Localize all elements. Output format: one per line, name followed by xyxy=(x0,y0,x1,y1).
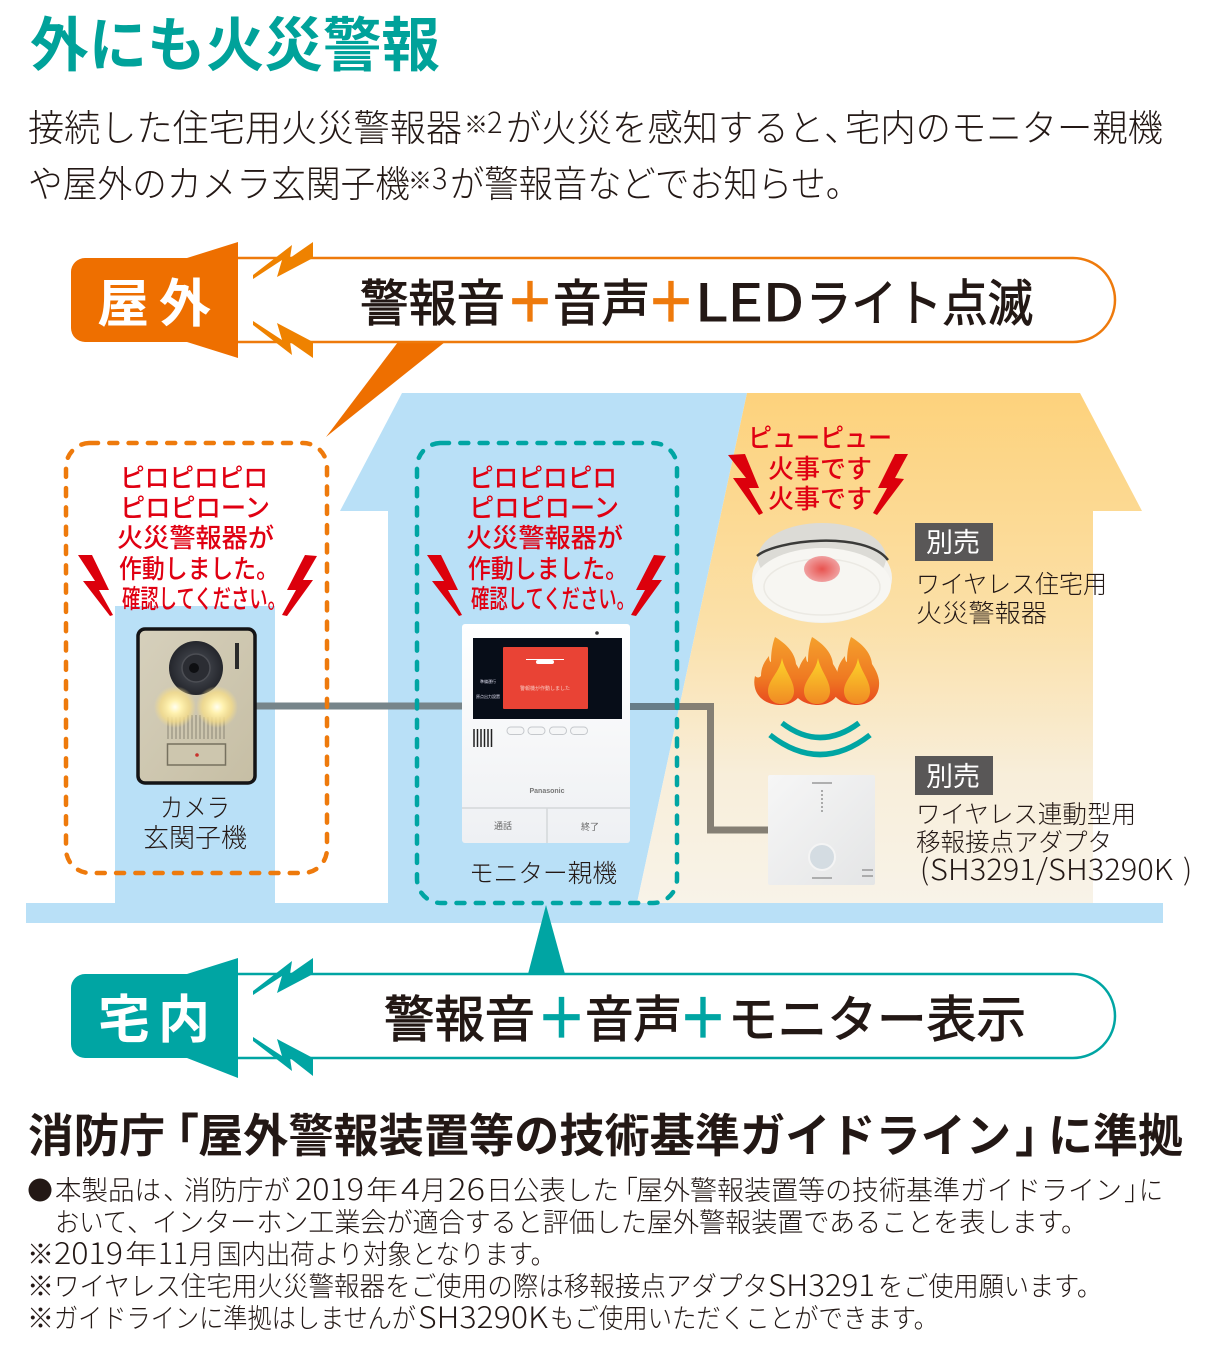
notes: 国内出荷より対象となります。 xyxy=(217,1233,555,1272)
notes: 4 xyxy=(401,1167,420,1209)
section heading: 消防庁 xyxy=(28,1110,165,1162)
banner text: ＋ xyxy=(680,991,726,1049)
intro text: ※ xyxy=(408,161,432,196)
notes: 2019 xyxy=(54,1231,123,1273)
notes: 26 xyxy=(448,1167,485,1209)
banner pill xyxy=(238,974,1115,1058)
section heading: 屋外警報装置等の技術基準ガイドライン xyxy=(198,1110,1011,1162)
alarm bolts: outdoor unit xyxy=(78,555,317,616)
intro text: や屋外のカメラ玄関子機 xyxy=(28,154,410,208)
alarm speech: outdoor unit: 確認してください。 xyxy=(122,584,286,614)
section heading: 」 xyxy=(1015,1110,1061,1162)
monitor unit: 通話 xyxy=(494,821,512,831)
badge label: 宅 xyxy=(98,992,150,1050)
notes: 年 xyxy=(366,1169,398,1208)
alarm speech: fire alarm: 火事です xyxy=(768,454,872,484)
intro text: 宅内のモニター親機 xyxy=(845,98,1163,152)
label: monitor unit: モニター親機 xyxy=(469,854,617,890)
sound bolts xyxy=(253,242,313,358)
relay adapter device xyxy=(768,775,875,885)
notes: おいて xyxy=(55,1201,127,1240)
notes: ※ xyxy=(27,1297,54,1336)
notes: 屋外警報装置等の技術基準ガイドライン xyxy=(636,1169,1122,1208)
notes: 」 xyxy=(1124,1169,1151,1208)
monitor unit: Panasonic xyxy=(529,788,565,795)
ground strip xyxy=(26,903,1163,923)
notes: 消防庁が xyxy=(184,1169,290,1208)
notes: 月 xyxy=(189,1233,214,1272)
intro text: 接続した住宅用火災警報器 xyxy=(28,98,462,152)
badge label: 屋 xyxy=(97,276,149,334)
notes: インターホン工業会が適合すると評価した屋外警報装置であることを表します。 xyxy=(152,1201,1087,1240)
notes: 年 xyxy=(125,1233,157,1272)
bullet xyxy=(28,1178,52,1202)
notes: に xyxy=(1139,1169,1163,1208)
house: blue indoor side xyxy=(115,393,747,906)
wireless fire alarm device xyxy=(752,523,892,623)
monitor unit: 終了 xyxy=(581,821,599,832)
alarm speech: fire alarm: 火事です xyxy=(768,484,872,514)
alarm speech: outdoor unit: 火災警報器が xyxy=(117,523,274,553)
title: 外にも火災警報 xyxy=(30,13,440,79)
dashed box: monitor xyxy=(417,443,677,903)
camera door unit xyxy=(138,629,255,783)
indoor alert banner xyxy=(71,905,1115,1078)
alarm speech: outdoor unit: ピロピローン xyxy=(120,493,270,523)
banner text: ＋ xyxy=(648,275,694,333)
speaker badge xyxy=(71,958,238,1078)
notes: ※ xyxy=(27,1265,54,1304)
tag: sold separately (adapter) xyxy=(915,756,993,795)
sound bolts xyxy=(253,958,313,1076)
label: camera door unit: 玄関子機 xyxy=(143,818,247,855)
badge label xyxy=(97,276,211,334)
notes: SH3291 xyxy=(768,1263,875,1305)
dashed box: outdoor unit xyxy=(66,443,327,873)
intro text: ※ xyxy=(464,105,488,140)
wireless waves xyxy=(770,723,870,754)
label: relay adapter: ワイヤレス連動型用 xyxy=(916,795,1136,831)
monitor unit xyxy=(462,624,630,843)
speaker badge xyxy=(71,242,238,358)
label: camera door unit xyxy=(143,788,247,855)
alarm speech: monitor: ピロピロピロ xyxy=(469,463,617,493)
monitor unit: 準備運行 xyxy=(480,678,496,684)
label: relay adapter xyxy=(916,795,1192,889)
intro text xyxy=(28,98,1163,208)
banner text: 警報音 xyxy=(384,992,535,1048)
intro text: 3 xyxy=(432,156,448,198)
intro text: が火災を感知すると xyxy=(506,98,824,152)
tag: sold separately (adapter): 別売 xyxy=(926,762,980,792)
banner text xyxy=(384,991,1026,1049)
badge label: 外 xyxy=(159,276,211,334)
label: camera door unit: カメラ xyxy=(160,788,230,825)
notes: 11 xyxy=(158,1231,188,1273)
alarm speech: monitor xyxy=(466,463,635,614)
notes: ※ xyxy=(27,1233,54,1272)
banner text: ＋ xyxy=(538,991,585,1049)
callout wedge: outdoor xyxy=(326,342,445,437)
badge label: 内 xyxy=(158,992,210,1050)
alarm speech: outdoor unit: ピロピロピロ xyxy=(120,463,268,493)
notes: 2019 xyxy=(295,1167,364,1209)
alarm speech: fire alarm: ピューピュー xyxy=(748,423,892,453)
connection cable xyxy=(255,706,768,830)
alarm speech: outdoor unit: 作動しました。 xyxy=(119,554,279,584)
banner pill xyxy=(238,258,1115,342)
label: wireless fire alarm: 火災警報器 xyxy=(916,594,1047,630)
label: relay adapter: SH3291/SH3290K xyxy=(930,847,1173,889)
tag: sold separately (alarm) xyxy=(915,523,993,561)
monitor unit: 原点出力設置 xyxy=(476,693,500,699)
banner text: ライト点滅 xyxy=(806,276,1033,332)
tag: sold separately (alarm): 別売 xyxy=(926,528,980,558)
notes: ワイヤレス住宅用火災警報器をご使用の際は移報接点アダプタ xyxy=(54,1265,768,1304)
banner text: LED xyxy=(695,262,804,336)
alarm speech: monitor: 作動しました。 xyxy=(468,554,628,584)
banner text: ＋ xyxy=(507,275,553,333)
label: relay adapter: ) xyxy=(1183,847,1192,889)
notes: 日公表した xyxy=(486,1169,619,1208)
banner text: 警報音 xyxy=(360,276,505,332)
intro text: 2 xyxy=(487,100,503,142)
banner text: 音声 xyxy=(553,276,650,332)
intro text: 、 xyxy=(824,98,861,152)
notes: ガイドラインに準拠はしませんが xyxy=(54,1297,416,1336)
notes: 月 xyxy=(421,1169,446,1208)
notes: 本製品は xyxy=(55,1169,161,1208)
outdoor alert banner xyxy=(71,242,1115,437)
alarm speech: fire alarm xyxy=(748,423,892,514)
flames xyxy=(754,637,879,705)
badge label xyxy=(98,992,210,1050)
notes: をご使用願います。 xyxy=(878,1265,1102,1304)
section heading: に準拠 xyxy=(1048,1110,1183,1162)
section heading: 「 xyxy=(153,1110,199,1162)
alarm speech: monitor: 火災警報器が xyxy=(466,523,623,553)
callout triangle: indoor xyxy=(528,905,565,974)
banner text xyxy=(360,262,1033,336)
banner text: モニター表示 xyxy=(728,992,1026,1048)
monitor unit: 警報機が作動しました xyxy=(520,685,570,692)
intro text: が警報音などでお知らせ。 xyxy=(450,154,860,208)
house: warm area with fire alarm xyxy=(637,393,1142,903)
alarm speech: monitor: ピロピローン xyxy=(469,493,619,523)
alarm speech: monitor: 確認してください。 xyxy=(471,584,635,614)
notes: もご使用いただくことができます。 xyxy=(550,1297,938,1336)
alarm speech: outdoor unit xyxy=(117,463,286,614)
notes xyxy=(27,1167,1163,1337)
notes: 「 xyxy=(611,1169,638,1208)
notes: SH3290K xyxy=(418,1295,549,1337)
notes: 、 xyxy=(163,1169,190,1208)
alarm bolts: monitor xyxy=(427,555,666,616)
label: relay adapter: 移報接点アダプタ xyxy=(916,823,1112,859)
label: wireless fire alarm xyxy=(916,565,1107,630)
banner text: 音声 xyxy=(585,992,682,1048)
label: relay adapter: ( xyxy=(920,847,929,889)
label: wireless fire alarm: ワイヤレス住宅用 xyxy=(916,565,1107,601)
notes: 、 xyxy=(127,1201,154,1240)
alarm bolts: fire alarm xyxy=(728,454,908,515)
